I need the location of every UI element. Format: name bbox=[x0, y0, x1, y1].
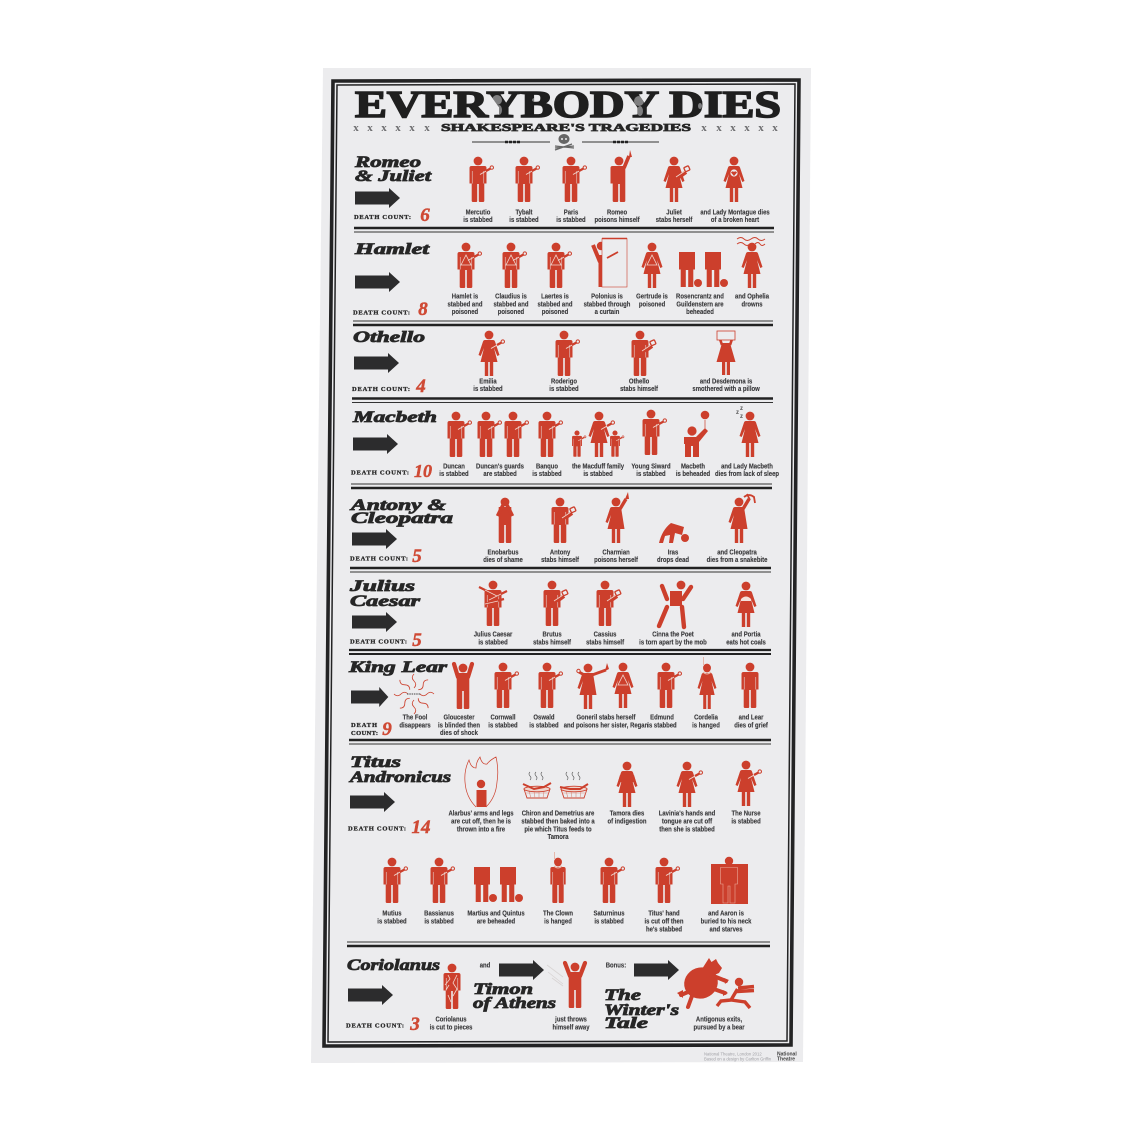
death count bbox=[348, 817, 430, 838]
figure: Juliet: stabs herself bbox=[656, 217, 693, 224]
play title: Caesar bbox=[350, 593, 421, 610]
play title: The bbox=[604, 987, 641, 1004]
footer credit bbox=[704, 1052, 772, 1062]
figure: Aaron buried: and Aaron is bbox=[708, 910, 744, 918]
death count: DEATH COUNT: bbox=[352, 386, 410, 393]
play title: Coriolanus bbox=[347, 957, 440, 974]
figure: Lavinia: Lavinia's hands and bbox=[659, 810, 715, 818]
figure: Juliet: Juliet bbox=[666, 209, 683, 217]
figure: Aaron buried: buried to his neck bbox=[701, 918, 752, 926]
right ornament crosses: x bbox=[701, 122, 707, 134]
figure: Lear bbox=[734, 663, 769, 729]
figure: Lear: dies of grief bbox=[734, 722, 769, 729]
icon: Antigonus running bbox=[717, 978, 754, 1008]
figure: Lavinia: then she is stabbed bbox=[659, 826, 715, 833]
right ornament crosses bbox=[701, 122, 778, 134]
play title: Othello bbox=[353, 329, 425, 346]
figure: Gloucester bbox=[438, 664, 480, 737]
figure: Portia: and Portia bbox=[732, 631, 761, 639]
figure: Lady Macbeth: and Lady Macbeth bbox=[721, 463, 773, 471]
figure: The Clown bbox=[543, 852, 573, 926]
figure: Martius and Quintus: Martius and Quintus bbox=[467, 910, 525, 918]
right ornament crosses: x bbox=[716, 122, 722, 134]
footer credit: National Theatre, London 2012 bbox=[704, 1052, 762, 1056]
figure: Coriolanus: is cut to pieces bbox=[430, 1024, 473, 1031]
figure: Polonius behind curtain: stabbed through bbox=[584, 301, 630, 308]
death count bbox=[353, 299, 428, 320]
figure: Chiron and Demetrius pies: Tamora bbox=[548, 834, 569, 841]
death count bbox=[351, 461, 432, 481]
figure: Duncan's guards bbox=[476, 412, 528, 478]
figure: Gloucester: dies of shock bbox=[440, 730, 478, 737]
figure: Goneril and Regan bbox=[564, 663, 648, 729]
death count: 14 bbox=[412, 817, 430, 838]
figure: Paris: is stabbed bbox=[556, 217, 586, 224]
right ornament crosses: x bbox=[730, 122, 736, 134]
figure: Lady Macbeth: z bbox=[740, 414, 743, 420]
figure: Chiron and Demetrius pies bbox=[521, 772, 595, 841]
figure: Rosencrantz and Guildenstern: Rosencrantz and bbox=[676, 293, 724, 301]
connector word: Bonus: bbox=[606, 962, 626, 970]
figure: Gloucester: is blinded then bbox=[438, 722, 480, 729]
death count bbox=[350, 546, 422, 567]
panel: Hamlet bbox=[353, 238, 769, 320]
figure: Mercutio: Mercutio bbox=[466, 209, 490, 217]
figure: Macbeth holding head: is beheaded bbox=[676, 471, 710, 478]
figure: Alarbus in fire: Alarbus' arms and legs bbox=[448, 810, 514, 818]
death count bbox=[351, 719, 392, 740]
figure: Duncan: is stabbed bbox=[439, 471, 469, 478]
caption: The Fool: disappears bbox=[399, 722, 431, 729]
figure: Lady Montague bbox=[700, 157, 770, 224]
figure: Claudius: stabbed and bbox=[494, 301, 529, 308]
figure: Macbeth holding head bbox=[676, 411, 710, 478]
figure: Paris: Paris bbox=[564, 209, 579, 217]
figure: Enobarbus bbox=[483, 498, 523, 564]
figure: The Clown: The Clown bbox=[543, 910, 573, 918]
figure: Lady Macbeth bbox=[715, 406, 779, 478]
figure: Timon: himself away bbox=[553, 1024, 590, 1031]
figure: Hamlet bbox=[448, 243, 483, 316]
figure: Polonius behind curtain: Polonius is bbox=[591, 293, 623, 301]
figure: Rosencrantz and Guildenstern bbox=[676, 252, 728, 316]
figure: Chiron and Demetrius pies: Chiron and Demetrius are bbox=[522, 810, 595, 818]
figure: Julius Caesar: Julius Caesar bbox=[474, 631, 513, 639]
figure: Hamlet: poisoned bbox=[452, 309, 478, 316]
figure: Lady Montague: and Lady Montague dies bbox=[700, 209, 770, 217]
play title bbox=[604, 987, 679, 1032]
figure: Ophelia: and Ophelia bbox=[735, 293, 769, 301]
play title bbox=[354, 154, 432, 185]
panel: The Winter's Tale bbox=[604, 958, 754, 1032]
play title: Andronicus bbox=[349, 769, 451, 786]
figure: Aaron buried: and starves bbox=[710, 926, 743, 933]
left ornament crosses: x bbox=[395, 122, 401, 134]
figure: Oswald: is stabbed bbox=[529, 722, 559, 729]
figure: Young Siward bbox=[631, 410, 671, 478]
figure: Goneril and Regan: and poisons her sister, Regan bbox=[564, 722, 648, 729]
arrow bbox=[353, 434, 398, 454]
death count bbox=[352, 376, 426, 397]
figure: Gertrude: poisoned bbox=[639, 301, 665, 308]
figure: Young Siward: Young Siward bbox=[631, 463, 671, 471]
figure: the Macduff family: the Macduff family bbox=[572, 463, 624, 471]
death count: 4 bbox=[415, 376, 426, 397]
figure: Gloucester: Gloucester bbox=[443, 714, 475, 722]
caption: Antigonus: pursued by a bear bbox=[693, 1024, 745, 1031]
figure: The Nurse: The Nurse bbox=[731, 810, 761, 818]
figure: Mercutio bbox=[463, 157, 494, 224]
arrow bbox=[354, 353, 399, 373]
death count: 3 bbox=[409, 1014, 420, 1035]
figure: Othello: stabs himself bbox=[620, 386, 659, 393]
figure: Martius and Quintus bbox=[467, 867, 525, 926]
figure: Iras: drops dead bbox=[657, 557, 689, 564]
figure: Aaron buried bbox=[701, 857, 752, 933]
figure: Alarbus in fire: thrown into a fire bbox=[457, 826, 505, 833]
left ornament crosses: x bbox=[424, 122, 430, 134]
figure: Roderigo: is stabbed bbox=[549, 386, 579, 393]
death count: DEATH bbox=[351, 722, 377, 729]
figure: Lady Macbeth: dies from lack of sleep bbox=[715, 471, 779, 478]
figure: Antony bbox=[541, 498, 580, 564]
figure: Desdemona bbox=[692, 331, 761, 393]
figure: Cornwall bbox=[488, 663, 518, 729]
figure: Portia bbox=[726, 582, 766, 646]
left ornament crosses: x bbox=[381, 122, 387, 134]
figure: Ophelia bbox=[735, 238, 769, 308]
arrow bbox=[348, 985, 393, 1005]
figure: Alarbus in fire: are cut off, then he is bbox=[451, 818, 511, 826]
death count: DEATH COUNT: bbox=[354, 214, 411, 221]
figure: Tamora: of indigestion bbox=[608, 818, 646, 826]
panel: Titus Andronicus bbox=[348, 754, 762, 933]
figure: Enobarbus: dies of shame bbox=[483, 557, 523, 564]
title ink texture bbox=[368, 95, 747, 116]
figure: Alarbus in fire bbox=[448, 757, 514, 833]
figure: Banquo bbox=[532, 412, 562, 478]
left ornament crosses: x bbox=[353, 122, 359, 134]
National Theatre logo: Theatre bbox=[777, 1056, 795, 1062]
play title: Timon bbox=[473, 981, 533, 998]
death count: 5 bbox=[412, 630, 422, 651]
figure: Lavinia bbox=[659, 762, 715, 833]
figure: Saturninus bbox=[594, 858, 625, 926]
panel: Romeo and Juliet bbox=[354, 150, 770, 226]
left ornament crosses: x bbox=[367, 122, 373, 134]
figure: Timon: just throws bbox=[554, 1016, 587, 1024]
figure: Ophelia: drowns bbox=[741, 301, 763, 308]
figure: Juliet bbox=[656, 157, 693, 224]
play title bbox=[349, 754, 451, 786]
figure: Bassianus bbox=[424, 858, 454, 926]
figure: Bassianus: Bassianus bbox=[424, 910, 454, 918]
figure: Desdemona: smothered with a pillow bbox=[692, 386, 761, 393]
inner frame bbox=[328, 84, 795, 1042]
figure: Iras: Iras bbox=[668, 549, 679, 557]
death count bbox=[354, 205, 430, 226]
figure: Othello: Othello bbox=[629, 378, 649, 386]
right ornament crosses: x bbox=[744, 122, 750, 134]
play title: Winter's bbox=[604, 1002, 679, 1019]
figure: Cinna torn apart: Cinna the Poet bbox=[652, 631, 695, 639]
left ornament crosses bbox=[353, 122, 430, 134]
figure: Cordelia: Cordelia bbox=[694, 714, 718, 722]
play title: King Lear bbox=[348, 659, 448, 676]
figure: Titus bbox=[645, 858, 684, 933]
figure: Roderigo: Roderigo bbox=[551, 378, 577, 386]
figure: Charmian: Charmian bbox=[602, 549, 630, 557]
figure: Tamora bbox=[608, 762, 646, 826]
figure: Julius Caesar: is stabbed bbox=[478, 639, 508, 646]
figure: Goneril and Regan: Goneril stabs herself bbox=[576, 714, 636, 722]
figure: Hamlet: stabbed and bbox=[448, 301, 483, 308]
figure: Desdemona: and Desdemona is bbox=[700, 378, 753, 386]
figure: Claudius: Claudius is bbox=[495, 293, 527, 301]
skull and crossbones divider bbox=[472, 134, 659, 150]
arrow bbox=[355, 188, 400, 208]
play title bbox=[473, 981, 556, 1012]
figure: Lady Macbeth: z bbox=[736, 410, 739, 416]
death count: 6 bbox=[420, 205, 430, 226]
figure: Lady Montague: of a broken heart bbox=[711, 217, 760, 224]
figure: Gertrude: Gertrude is bbox=[636, 293, 668, 301]
figure: Cassius bbox=[586, 581, 625, 646]
figure: Tybalt: is stabbed bbox=[509, 217, 539, 224]
figure: Laertes: poisoned bbox=[542, 309, 568, 316]
panel: Coriolanus bbox=[346, 957, 473, 1035]
play title: of Athens bbox=[473, 995, 556, 1012]
figure: Macbeth holding head: Macbeth bbox=[681, 463, 705, 471]
figure: Duncan: Duncan bbox=[443, 463, 465, 471]
caption: The Fool: The Fool bbox=[403, 714, 428, 722]
panel: King Lear bbox=[348, 657, 769, 740]
figure: Mercutio: is stabbed bbox=[463, 217, 493, 224]
figure: Cinna torn apart bbox=[639, 581, 707, 646]
figure: Othello bbox=[620, 331, 659, 393]
play title bbox=[350, 497, 453, 527]
figure: Antony: stabs himself bbox=[541, 557, 580, 564]
death count bbox=[350, 630, 422, 651]
figure: Romeo: poisons himself bbox=[594, 217, 640, 224]
play title: Macbeth bbox=[352, 409, 437, 426]
arrow bbox=[355, 272, 400, 292]
figure: Cornwall: is stabbed bbox=[488, 722, 518, 729]
figure: Banquo: is stabbed bbox=[532, 471, 562, 478]
death count: DEATH COUNT: bbox=[353, 310, 410, 316]
title: EVERYBODY DIES bbox=[355, 84, 781, 126]
figure: Gertrude bbox=[636, 243, 668, 308]
figure: Rosencrantz and Guildenstern: beheaded bbox=[686, 309, 714, 316]
figure: Oswald bbox=[529, 663, 562, 729]
play title: Julius bbox=[348, 578, 415, 595]
icon: the Fool's vanishing swirl bbox=[394, 674, 434, 714]
figure: Portia: eats hot coals bbox=[726, 639, 766, 646]
figure: Mutius: Mutius bbox=[382, 910, 402, 918]
figure: Titus: he's stabbed bbox=[646, 926, 682, 933]
figure: Claudius bbox=[494, 243, 529, 316]
figure: Lear: and Lear bbox=[739, 714, 764, 722]
figure: Iras bbox=[657, 523, 689, 564]
panel: Othello bbox=[352, 329, 761, 397]
figure: Lady Macbeth: z bbox=[740, 406, 743, 412]
left ornament crosses: x bbox=[409, 122, 415, 134]
figure: Coriolanus: Coriolanus bbox=[436, 1016, 467, 1024]
figure: Chiron and Demetrius pies: pie which Titus feeds to bbox=[524, 826, 592, 833]
figure: Enobarbus: Enobarbus bbox=[488, 549, 519, 557]
figure: Brutus bbox=[533, 581, 572, 646]
figure: Edmund: Edmund bbox=[650, 714, 674, 722]
figure: Charmian: poisons herself bbox=[594, 557, 639, 564]
figure: Duncan's guards: are stabbed bbox=[483, 471, 517, 478]
figure: Martius and Quintus: are beheaded bbox=[477, 918, 515, 926]
figure: Young Siward: is stabbed bbox=[636, 471, 666, 478]
arrow bbox=[351, 687, 388, 707]
play title: Titus bbox=[350, 754, 401, 771]
figure: Mutius bbox=[377, 858, 408, 926]
figure: Cleopatra: and Cleopatra bbox=[717, 549, 757, 557]
figure: Rosencrantz and Guildenstern: Guildenstern are bbox=[676, 301, 724, 308]
figure: Timon bbox=[547, 963, 590, 1031]
figure: Polonius behind curtain: a curtain bbox=[595, 309, 619, 316]
play title: Romeo bbox=[354, 154, 421, 171]
figure: The Nurse bbox=[731, 761, 762, 826]
figure: Laertes: stabbed and bbox=[538, 301, 573, 308]
panel: Macbeth bbox=[351, 406, 779, 481]
death count: 8 bbox=[418, 299, 428, 320]
arrow bbox=[350, 792, 395, 812]
figure: Tybalt bbox=[509, 157, 540, 224]
figure: Duncan bbox=[439, 412, 472, 478]
death count: COUNT: bbox=[351, 730, 378, 737]
right ornament crosses: x bbox=[758, 122, 764, 134]
play title bbox=[348, 578, 421, 610]
right ornament crosses: x bbox=[772, 122, 778, 134]
figure: Banquo: Banquo bbox=[536, 463, 558, 471]
figure: Cordelia: is hanged bbox=[692, 722, 720, 729]
arrow bbox=[499, 960, 544, 980]
death count: DEATH COUNT: bbox=[350, 556, 408, 562]
figure: Coriolanus bbox=[430, 964, 473, 1031]
panel: Julius Caesar bbox=[348, 578, 766, 651]
figure: The Clown: is hanged bbox=[544, 918, 572, 926]
play title: Tale bbox=[604, 1015, 648, 1032]
connector word: and bbox=[480, 962, 490, 970]
figure: Tybalt: Tybalt bbox=[515, 209, 533, 217]
figure: Saturninus: Saturninus bbox=[594, 910, 625, 918]
figure: Mutius: is stabbed bbox=[377, 918, 407, 926]
subtitle: SHAKESPEARE'S TRAGEDIES bbox=[441, 123, 691, 134]
figure: Cleopatra bbox=[707, 494, 768, 564]
figure: Edmund bbox=[647, 663, 682, 729]
play title: & Juliet bbox=[355, 168, 432, 185]
figure: Romeo: Romeo bbox=[607, 209, 627, 217]
figure: Laertes: Laertes is bbox=[541, 293, 569, 301]
figure: the Macduff family: is stabbed bbox=[583, 471, 613, 478]
figure: Edmund: is stabbed bbox=[647, 722, 677, 729]
death count: DEATH COUNT: bbox=[350, 638, 407, 646]
arrow bbox=[352, 612, 397, 632]
caption: Antigonus: Antigonus exits, bbox=[696, 1016, 742, 1024]
figure: Titus: is cut off then bbox=[645, 918, 684, 926]
figure: Romeo bbox=[594, 150, 640, 224]
National Theatre logo bbox=[777, 1052, 797, 1062]
panel: Timon of Athens bbox=[473, 960, 590, 1031]
panel: Antony and Cleopatra bbox=[350, 492, 768, 567]
figure: Chiron and Demetrius pies: stabbed then baked into a bbox=[521, 818, 595, 826]
figure: Oswald: Oswald bbox=[533, 714, 555, 722]
figure: Emilia: Emilia bbox=[479, 378, 497, 386]
arrow bbox=[634, 960, 679, 980]
figure: Emilia bbox=[473, 331, 504, 393]
death count: 9 bbox=[382, 719, 392, 740]
figure: Laertes bbox=[538, 243, 573, 316]
figure: Roderigo bbox=[549, 331, 580, 393]
figure: Charmian bbox=[594, 492, 639, 564]
figure: the Macduff family bbox=[572, 412, 624, 478]
figure: Duncan's guards: Duncan's guards bbox=[476, 463, 524, 471]
figure: Brutus: stabs himself bbox=[533, 639, 572, 646]
figure: Claudius: poisoned bbox=[498, 309, 524, 316]
figure: Cleopatra: dies from a snakebite bbox=[707, 557, 768, 564]
National Theatre logo: National bbox=[777, 1052, 797, 1058]
poster sheet bbox=[311, 68, 811, 1063]
play title: Hamlet bbox=[353, 241, 430, 258]
figure: Cornwall: Cornwall bbox=[490, 714, 516, 722]
death count: 5 bbox=[412, 546, 422, 567]
figure: Saturninus: is stabbed bbox=[594, 918, 624, 926]
figure: Bassianus: is stabbed bbox=[424, 918, 454, 926]
death count: 10 bbox=[414, 461, 432, 481]
death count: DEATH COUNT: bbox=[351, 470, 409, 476]
figure: Tamora: Tamora dies bbox=[610, 810, 645, 818]
figure: Lavinia: tongue are cut off bbox=[662, 818, 713, 826]
figure: Emilia: is stabbed bbox=[473, 386, 503, 393]
figure: Paris bbox=[556, 157, 586, 224]
figure: Cassius: Cassius bbox=[594, 631, 617, 639]
figure: Antony: Antony bbox=[550, 549, 571, 557]
figure: Titus: Titus' hand bbox=[648, 910, 680, 918]
death count: DEATH COUNT: bbox=[348, 826, 406, 832]
footer credit: Based on a design by Carlton Griffin bbox=[704, 1056, 772, 1062]
figure: Polonius behind curtain bbox=[584, 238, 630, 316]
death count bbox=[346, 1014, 420, 1035]
figure: The Nurse: is stabbed bbox=[731, 818, 761, 826]
outer frame bbox=[324, 80, 799, 1046]
figure: Cordelia bbox=[692, 657, 720, 729]
figure: Cinna torn apart: is torn apart by the mob bbox=[639, 639, 707, 646]
death count: DEATH COUNT: bbox=[346, 1022, 404, 1030]
figure: Brutus: Brutus bbox=[542, 631, 562, 639]
play title: Antony & bbox=[350, 497, 447, 514]
figure: Julius Caesar bbox=[474, 581, 513, 646]
play title: Cleopatra bbox=[351, 510, 453, 527]
figure: Hamlet: Hamlet is bbox=[452, 293, 479, 301]
icon: bear bbox=[677, 958, 729, 1007]
arrow bbox=[352, 529, 397, 549]
figure: Cassius: stabs himself bbox=[586, 639, 625, 646]
